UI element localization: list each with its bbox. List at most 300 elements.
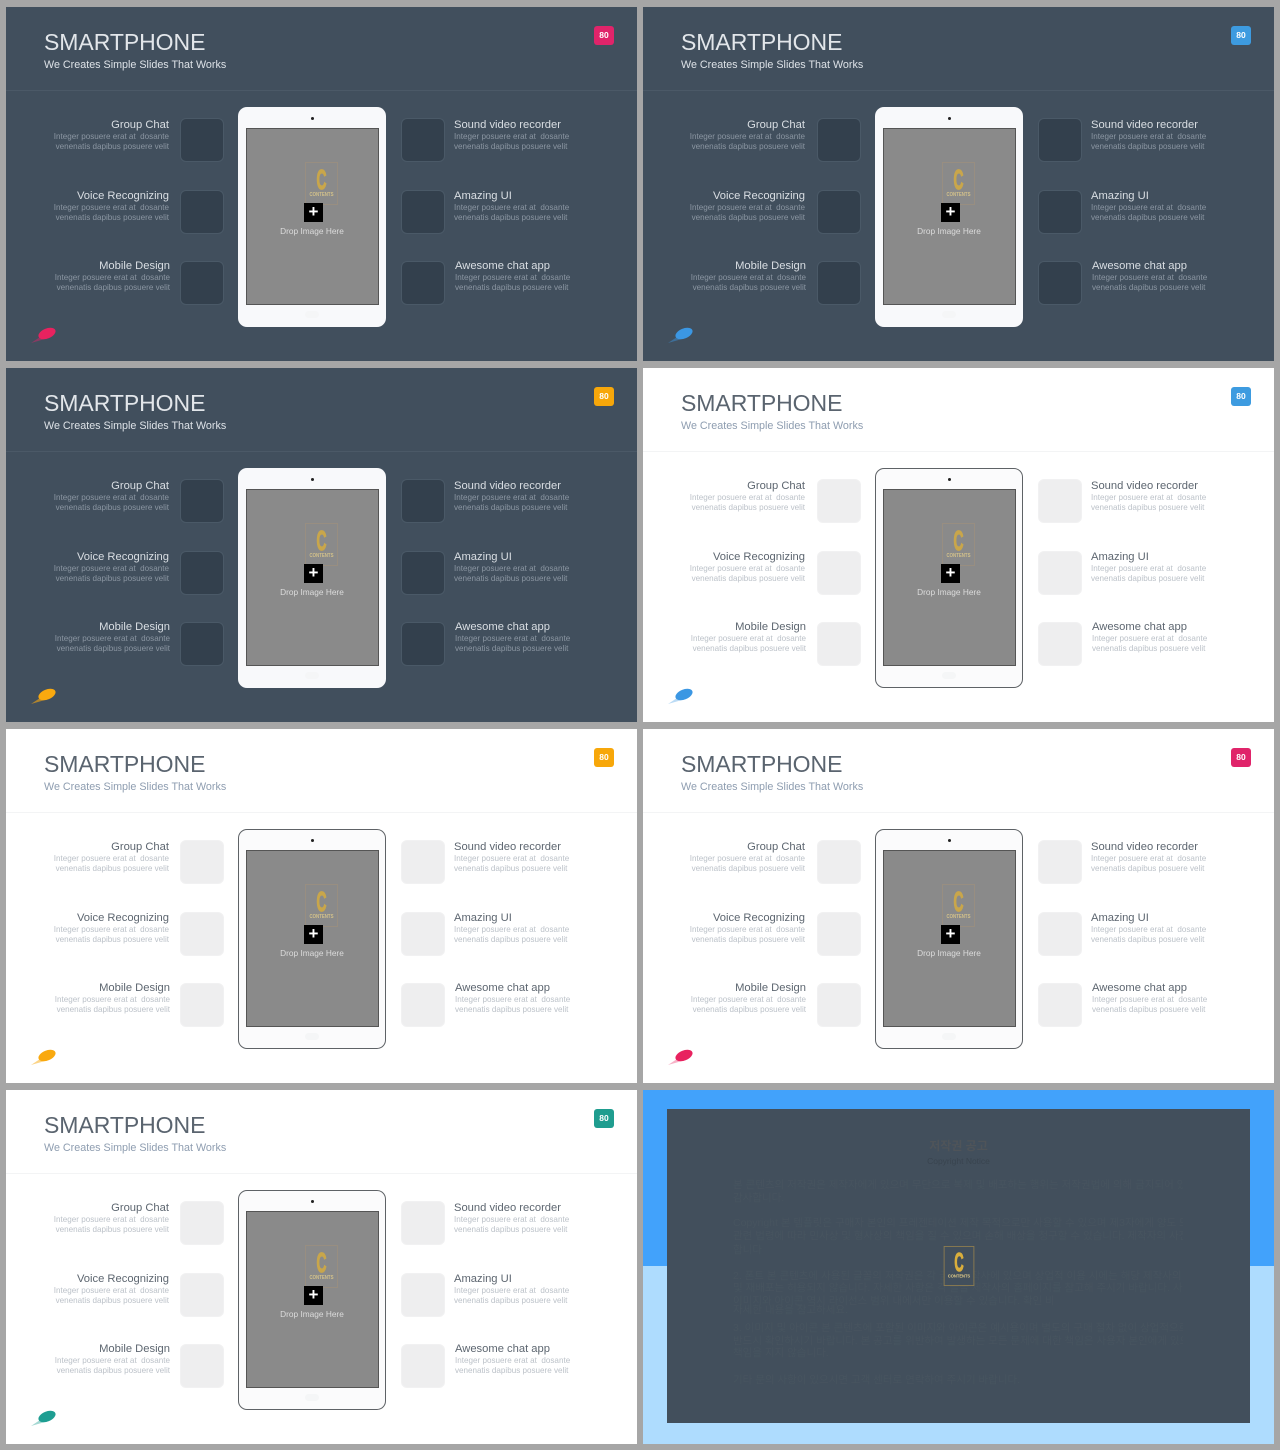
feature: Group Chat: venenatis dapibus posuere velit <box>692 864 805 873</box>
feature: Awesome chat app: venenatis dapibus posuere velit <box>1092 1005 1205 1014</box>
feature: Voice Recognizing: Voice Recognizing <box>713 912 805 924</box>
page badge <box>1231 748 1251 767</box>
feature: Group Chat <box>690 480 805 512</box>
icon box: Mobile Design <box>180 261 224 305</box>
feature: Awesome chat app: Awesome chat app <box>455 982 550 994</box>
feature: Sound video recorder <box>1091 480 1206 512</box>
feature: Voice Recognizing <box>54 912 169 944</box>
icon box: Voice Recognizing <box>180 1273 224 1317</box>
plus button <box>941 925 960 944</box>
feature: Mobile Design <box>55 621 170 653</box>
icon: rocket <box>29 1407 59 1429</box>
tablet body <box>238 829 386 1049</box>
page badge <box>1231 387 1251 406</box>
feature: Awesome chat app: venenatis dapibus posuere velit <box>455 1366 568 1375</box>
icon box: Sound video recorder <box>1038 479 1082 523</box>
feature: Sound video recorder <box>454 119 569 151</box>
feature: Mobile Design: Integer posuere erat at dosante <box>55 634 170 643</box>
icon box: Amazing UI <box>1038 551 1082 595</box>
feature: Mobile Design: Mobile Design <box>99 982 170 994</box>
icon box: Mobile Design <box>817 622 861 666</box>
feature: Sound video recorder <box>454 480 569 512</box>
subtitle: We Creates Simple Slides That Works <box>681 59 863 71</box>
feature: Mobile Design: venenatis dapibus posuere velit <box>57 1005 170 1014</box>
page badge: 80 <box>599 30 609 40</box>
icon box: Group Chat <box>180 1201 224 1245</box>
logo: C <box>316 164 326 195</box>
icon box: Group Chat <box>817 479 861 523</box>
feature: Awesome chat app: Awesome chat app <box>455 621 550 633</box>
drop image label: Drop Image Here <box>280 587 344 597</box>
slide 3: dark orange <box>6 368 637 722</box>
feature: Amazing UI: venenatis dapibus posuere velit <box>454 935 567 944</box>
feature: Voice Recognizing: Voice Recognizing <box>77 912 169 924</box>
feature: Awesome chat app: venenatis dapibus posuere velit <box>1092 283 1205 292</box>
plus button <box>304 203 323 222</box>
feature: Group Chat: Group Chat <box>111 841 169 853</box>
drop image label: Drop Image Here <box>280 948 344 958</box>
feature: Group Chat: Integer posuere erat at dosante <box>690 132 805 141</box>
title: SMARTPHONE <box>44 390 205 416</box>
logo: CONTENTS <box>946 914 971 920</box>
icon box: Sound video recorder <box>1038 118 1082 162</box>
copyright subheading: Copyright Notice <box>927 1156 990 1166</box>
logo: C <box>954 886 964 917</box>
drop image label: Drop Image Here <box>280 1309 344 1319</box>
feature: Awesome chat app: venenatis dapibus posuere velit <box>455 283 568 292</box>
title: SMARTPHONE <box>681 390 842 416</box>
slide 7: light teal <box>6 1090 637 1444</box>
tablet camera <box>310 838 314 842</box>
tablet home button <box>305 1394 319 1401</box>
feature: Group Chat <box>54 480 169 512</box>
title: SMARTPHONE <box>681 751 842 777</box>
feature: Group Chat: venenatis dapibus posuere velit <box>56 142 169 151</box>
tablet screen placeholder <box>883 489 1016 666</box>
logo: C <box>316 1247 326 1278</box>
tablet camera <box>948 478 950 480</box>
tablet home button <box>942 672 956 679</box>
icon box: Mobile Design <box>817 261 861 305</box>
feature: Sound video recorder: Sound video recorder <box>454 480 561 492</box>
feature: Mobile Design: venenatis dapibus posuere velit <box>57 1366 170 1375</box>
feature: Sound video recorder: Integer posuere erat at dosante <box>1091 132 1206 141</box>
feature: Group Chat: venenatis dapibus posuere velit <box>692 142 805 151</box>
drop image label: Drop Image Here <box>917 226 981 236</box>
tablet screen placeholder <box>246 128 379 305</box>
feature: Amazing UI: Amazing UI <box>454 1273 512 1285</box>
feature: Sound video recorder: Sound video recorder <box>454 1202 561 1214</box>
subtitle: We Creates Simple Slides That Works <box>44 420 226 432</box>
logo: C <box>954 164 964 195</box>
feature: Mobile Design: Mobile Design <box>735 621 806 633</box>
feature: Sound video recorder <box>454 841 569 873</box>
subtitle: We Creates Simple Slides That Works <box>44 781 226 793</box>
feature: Group Chat: venenatis dapibus posuere velit <box>56 1225 169 1234</box>
plus button: + <box>309 202 318 221</box>
feature: Amazing UI <box>454 551 569 583</box>
feature: Awesome chat app: Awesome chat app <box>1092 621 1187 633</box>
feature: Voice Recognizing: venenatis dapibus posuere velit <box>692 574 805 583</box>
feature: Sound video recorder <box>1091 839 1241 873</box>
feature: Amazing UI: Integer posuere erat at dosante <box>454 203 569 212</box>
page badge <box>1231 26 1251 45</box>
logo <box>305 1245 338 1288</box>
feature: Awesome chat app <box>1092 260 1207 292</box>
feature: Amazing UI <box>454 190 569 222</box>
tablet body <box>238 107 386 327</box>
feature: Voice Recognizing <box>54 551 169 583</box>
icon box: Amazing UI <box>401 551 445 595</box>
feature: Group Chat: Integer posuere erat at dosante <box>54 132 169 141</box>
feature: Sound video recorder <box>1091 119 1206 151</box>
subtitle: We Creates Simple Slides That Works <box>681 420 863 432</box>
feature: Amazing UI: Amazing UI <box>1091 551 1149 563</box>
feature: Awesome chat app: Integer posuere erat at dosante <box>455 995 570 1004</box>
plus button <box>941 564 960 583</box>
icon: rocket <box>31 688 56 704</box>
feature: Mobile Design: Integer posuere erat at dosante <box>691 634 806 643</box>
icon box: Amazing UI <box>401 912 445 956</box>
feature: Awesome chat app: Integer posuere erat at dosante <box>455 1356 570 1365</box>
tablet home button <box>305 1033 319 1040</box>
feature: Group Chat: Integer posuere erat at dosante <box>690 493 805 502</box>
feature: Amazing UI: Amazing UI <box>454 912 512 924</box>
feature: Sound video recorder: Integer posuere erat at dosante <box>454 493 569 502</box>
feature: Group Chat: Group Chat <box>111 480 169 492</box>
feature: Awesome chat app: Awesome chat app <box>1092 260 1187 272</box>
feature: Voice Recognizing: venenatis dapibus posuere velit <box>692 213 805 222</box>
tablet screen placeholder <box>246 850 379 1027</box>
feature: Voice Recognizing <box>690 551 805 583</box>
plus button: + <box>946 563 955 582</box>
feature: Voice Recognizing <box>54 190 169 222</box>
icon box: Sound video recorder <box>1038 840 1082 884</box>
icon box: Group Chat <box>817 118 861 162</box>
tablet camera <box>948 838 950 842</box>
feature: Awesome chat app: Awesome chat app <box>455 260 550 272</box>
feature: Group Chat: venenatis dapibus posuere velit <box>56 503 169 512</box>
icon box: Group Chat <box>180 479 224 523</box>
feature: Awesome chat app: Integer posuere erat at dosante <box>455 273 570 282</box>
feature: Amazing UI: Amazing UI <box>1091 912 1149 924</box>
feature: Sound video recorder: venenatis dapibus posuere velit <box>1091 142 1204 151</box>
feature: Group Chat: venenatis dapibus posuere velit <box>56 864 169 873</box>
tablet screen placeholder <box>246 489 379 666</box>
feature: Amazing UI: Amazing UI <box>454 190 512 202</box>
icon box: Mobile Design <box>180 983 224 1027</box>
icon box: Amazing UI <box>1038 912 1082 956</box>
feature: Mobile Design <box>55 260 170 292</box>
slide 6: light pink <box>643 729 1274 1083</box>
page badge: 80 <box>1236 391 1246 401</box>
icon box: Sound video recorder <box>401 479 445 523</box>
icon box: Voice Recognizing <box>180 912 224 956</box>
subtitle: We Creates Simple Slides That Works <box>44 1142 226 1154</box>
page badge: 80 <box>599 752 609 762</box>
feature: Voice Recognizing: Integer posuere erat at dosante <box>54 203 169 212</box>
feature: Amazing UI: Amazing UI <box>454 551 512 563</box>
logo <box>305 523 338 566</box>
feature: Voice Recognizing: Integer posuere erat at dosante <box>54 1286 169 1295</box>
feature: Voice Recognizing <box>690 190 805 222</box>
icon box: Sound video recorder <box>401 118 445 162</box>
page badge <box>594 748 614 767</box>
feature: Sound video recorder: venenatis dapibus posuere velit <box>454 1225 567 1234</box>
feature: Sound video recorder: Sound video recorder <box>454 841 561 853</box>
feature: Mobile Design <box>20 1341 170 1375</box>
page badge: 80 <box>599 1113 609 1123</box>
feature: Amazing UI: Integer posuere erat at dosante <box>1091 564 1206 573</box>
plus button <box>304 1286 323 1305</box>
logo <box>305 884 338 927</box>
feature: Voice Recognizing: Integer posuere erat at dosante <box>54 564 169 573</box>
copyright paragraphs: 감사합니다. <box>733 1192 784 1204</box>
feature: Amazing UI <box>1091 910 1241 944</box>
tablet body <box>875 829 1023 1049</box>
page badge: 80 <box>1236 30 1246 40</box>
feature: Group Chat: Group Chat <box>747 119 805 131</box>
feature: Mobile Design <box>55 982 170 1014</box>
tablet camera <box>948 116 950 120</box>
icon box: Amazing UI <box>401 1273 445 1317</box>
feature: Amazing UI: venenatis dapibus posuere velit <box>1091 574 1204 583</box>
page badge <box>594 1109 614 1128</box>
logo: CONTENTS <box>310 553 334 559</box>
logo: CONTENTS <box>948 1274 970 1279</box>
feature: Sound video recorder <box>454 1200 604 1234</box>
feature: Amazing UI: Integer posuere erat at dosante <box>454 1286 569 1295</box>
slide 5: light orange <box>6 729 637 1083</box>
icon box: Mobile Design <box>180 1344 224 1388</box>
logo <box>942 162 975 205</box>
panel: copyright <box>667 1109 1250 1423</box>
logo <box>942 884 975 927</box>
icon: rocket <box>31 1050 56 1065</box>
tablet home button <box>305 311 319 318</box>
logo: CONTENTS <box>310 1275 334 1281</box>
slide 2: dark blue <box>643 7 1274 361</box>
icon box: Voice Recognizing <box>180 551 224 595</box>
feature: Voice Recognizing: venenatis dapibus posuere velit <box>56 574 169 583</box>
plus button <box>304 564 323 583</box>
plus button: + <box>946 924 955 943</box>
feature: Amazing UI <box>454 1271 604 1305</box>
logo: CONTENTS <box>946 192 971 198</box>
icon: rocket <box>666 1046 696 1068</box>
feature: Amazing UI: Amazing UI <box>1091 190 1149 202</box>
tablet body <box>875 107 1023 327</box>
feature: Sound video recorder: Sound video recorder <box>1091 119 1198 131</box>
feature: Sound video recorder: Sound video recorder <box>1091 480 1198 492</box>
page badge <box>594 387 614 406</box>
plus button <box>941 203 960 222</box>
feature: Sound video recorder: Sound video recorder <box>1091 841 1198 853</box>
icon: rocket <box>668 688 693 704</box>
feature: Awesome chat app <box>455 982 570 1014</box>
subtitle: We Creates Simple Slides That Works <box>44 59 226 71</box>
feature: Group Chat <box>54 841 169 873</box>
feature: Awesome chat app: Integer posuere erat at dosante <box>455 634 570 643</box>
feature: Awesome chat app: Awesome chat app <box>1092 982 1187 994</box>
logo <box>943 1246 975 1286</box>
feature: Mobile Design: venenatis dapibus posuere velit <box>693 644 806 653</box>
feature: Group Chat: Integer posuere erat at dosante <box>690 854 805 863</box>
feature: Amazing UI: Integer posuere erat at dosante <box>1091 925 1206 934</box>
icon box: Awesome chat app <box>401 983 445 1027</box>
icon box: Group Chat <box>180 840 224 884</box>
feature: Group Chat <box>54 119 169 151</box>
feature: Mobile Design: venenatis dapibus posuere velit <box>57 283 170 292</box>
tablet screen placeholder <box>883 850 1016 1027</box>
subtitle: We Creates Simple Slides That Works <box>681 781 863 793</box>
icon box: Awesome chat app <box>401 1344 445 1388</box>
feature: Group Chat: Integer posuere erat at dosante <box>54 854 169 863</box>
icon box: Voice Recognizing <box>817 551 861 595</box>
plus button: + <box>309 1285 318 1304</box>
feature: Awesome chat app <box>455 621 570 653</box>
logo <box>942 523 975 566</box>
feature: Sound video recorder: Integer posuere erat at dosante <box>454 1215 569 1224</box>
feature: Sound video recorder: venenatis dapibus posuere velit <box>454 142 567 151</box>
feature: Awesome chat app: venenatis dapibus posuere velit <box>1092 644 1205 653</box>
feature: Voice Recognizing: Voice Recognizing <box>77 551 169 563</box>
feature: Amazing UI: Integer posuere erat at dosante <box>454 925 569 934</box>
icon box: Voice Recognizing <box>180 190 224 234</box>
icon box: Mobile Design <box>180 622 224 666</box>
feature: Sound video recorder: Integer posuere erat at dosante <box>1091 854 1206 863</box>
feature: Mobile Design: venenatis dapibus posuere velit <box>693 1005 806 1014</box>
feature: Mobile Design: Mobile Design <box>735 982 806 994</box>
feature: Amazing UI <box>1091 190 1206 222</box>
feature: Awesome chat app: Awesome chat app <box>455 1343 550 1355</box>
plus button: + <box>309 924 318 943</box>
feature: Group Chat: venenatis dapibus posuere velit <box>692 503 805 512</box>
feature: Awesome chat app: Integer posuere erat at dosante <box>1092 273 1207 282</box>
feature: Awesome chat app: venenatis dapibus posuere velit <box>455 1005 568 1014</box>
feature: Voice Recognizing: Voice Recognizing <box>77 1273 169 1285</box>
feature: Mobile Design <box>656 980 806 1014</box>
feature: Mobile Design: Mobile Design <box>99 260 170 272</box>
logo: C <box>316 886 326 917</box>
feature: Mobile Design: Integer posuere erat at dosante <box>55 1356 170 1365</box>
page badge: 80 <box>1236 752 1246 762</box>
drop image label: Drop Image Here <box>917 948 981 958</box>
feature: Awesome chat app <box>455 260 570 292</box>
icon box: Sound video recorder <box>401 840 445 884</box>
feature: Voice Recognizing: Voice Recognizing <box>77 190 169 202</box>
feature: Mobile Design <box>691 621 806 653</box>
feature: Amazing UI <box>454 912 569 944</box>
drop image label: Drop Image Here <box>917 587 981 597</box>
feature: Amazing UI: Integer posuere erat at dosante <box>454 564 569 573</box>
feature: Amazing UI: venenatis dapibus posuere velit <box>1091 935 1204 944</box>
slide 1: dark pink <box>6 7 637 361</box>
feature: Voice Recognizing: Integer posuere erat at dosante <box>54 925 169 934</box>
feature: Awesome chat app <box>455 1341 605 1375</box>
feature: Voice Recognizing <box>19 1271 169 1305</box>
feature: Sound video recorder: Integer posuere erat at dosante <box>454 132 569 141</box>
tablet screen placeholder <box>883 128 1016 305</box>
page badge <box>594 26 614 45</box>
slide 8: copyright notice <box>643 1090 1274 1444</box>
icon box: Awesome chat app <box>1038 983 1082 1027</box>
feature: Mobile Design: Integer posuere erat at dosante <box>55 273 170 282</box>
icon box: Amazing UI <box>1038 190 1082 234</box>
feature: Sound video recorder: venenatis dapibus posuere velit <box>454 503 567 512</box>
feature: Voice Recognizing: Integer posuere erat at dosante <box>690 564 805 573</box>
icon box: Voice Recognizing <box>817 190 861 234</box>
icon box: Amazing UI <box>401 190 445 234</box>
plus button: + <box>946 202 955 221</box>
title: SMARTPHONE <box>681 29 842 55</box>
icon: rocket <box>668 328 693 343</box>
tablet camera <box>310 478 314 480</box>
feature: Group Chat <box>19 1200 169 1234</box>
copyright paragraphs: 책임을 지지 않습니다. <box>733 1347 829 1359</box>
feature: Group Chat: Group Chat <box>111 1202 169 1214</box>
icon box: Group Chat <box>180 118 224 162</box>
feature: Voice Recognizing: Integer posuere erat at dosante <box>690 925 805 934</box>
feature: Group Chat: Group Chat <box>111 119 169 131</box>
tablet body <box>238 1190 386 1410</box>
feature: Voice Recognizing: venenatis dapibus posuere velit <box>56 935 169 944</box>
copyright paragraphs: 기타 문의 사항이 있으시면 고객 센터로 연락하여 주시기 바랍니다. <box>733 1374 1020 1386</box>
feature: Voice Recognizing: Voice Recognizing <box>713 551 805 563</box>
logo: C <box>316 525 326 556</box>
feature: Awesome chat app <box>1092 980 1242 1014</box>
tablet body <box>238 468 386 688</box>
feature: Mobile Design: venenatis dapibus posuere velit <box>57 644 170 653</box>
page badge: 80 <box>599 391 609 401</box>
feature: Mobile Design <box>691 260 806 292</box>
feature: Amazing UI: venenatis dapibus posuere velit <box>454 574 567 583</box>
feature: Group Chat: Integer posuere erat at dosante <box>54 493 169 502</box>
logo: C <box>954 525 964 556</box>
icon box: Awesome chat app <box>401 261 445 305</box>
feature: Mobile Design: Mobile Design <box>99 621 170 633</box>
icon box: Awesome chat app <box>401 622 445 666</box>
plus button <box>304 925 323 944</box>
feature: Sound video recorder: Sound video recorder <box>454 119 561 131</box>
feature: Sound video recorder: venenatis dapibus posuere velit <box>1091 503 1204 512</box>
feature: Mobile Design: Integer posuere erat at dosante <box>691 995 806 1004</box>
title: SMARTPHONE <box>44 29 205 55</box>
icon box: Voice Recognizing <box>817 912 861 956</box>
feature: Voice Recognizing: venenatis dapibus posuere velit <box>692 935 805 944</box>
feature: Voice Recognizing: venenatis dapibus posuere velit <box>56 213 169 222</box>
icon box: Sound video recorder <box>401 1201 445 1245</box>
drop image label: Drop Image Here <box>280 226 344 236</box>
plus button: + <box>309 563 318 582</box>
feature: Voice Recognizing: Integer posuere erat at dosante <box>690 203 805 212</box>
logo: CONTENTS <box>310 914 334 920</box>
copyright paragraphs <box>667 1109 1250 1423</box>
feature: Group Chat: Integer posuere erat at dosante <box>54 1215 169 1224</box>
icon box: Mobile Design <box>817 983 861 1027</box>
icon box: Group Chat <box>817 840 861 884</box>
feature: Awesome chat app: venenatis dapibus posuere velit <box>455 644 568 653</box>
tablet body <box>875 468 1023 688</box>
tablet home button <box>942 1033 956 1040</box>
slide 4: light blue <box>643 368 1274 722</box>
logo: CONTENTS <box>310 192 334 198</box>
feature: Sound video recorder: venenatis dapibus posuere velit <box>1091 864 1204 873</box>
feature: Voice Recognizing <box>655 910 805 944</box>
title: SMARTPHONE <box>44 1112 205 1138</box>
feature: Awesome chat app: Integer posuere erat at dosante <box>1092 995 1207 1004</box>
tablet camera <box>310 1200 314 1202</box>
